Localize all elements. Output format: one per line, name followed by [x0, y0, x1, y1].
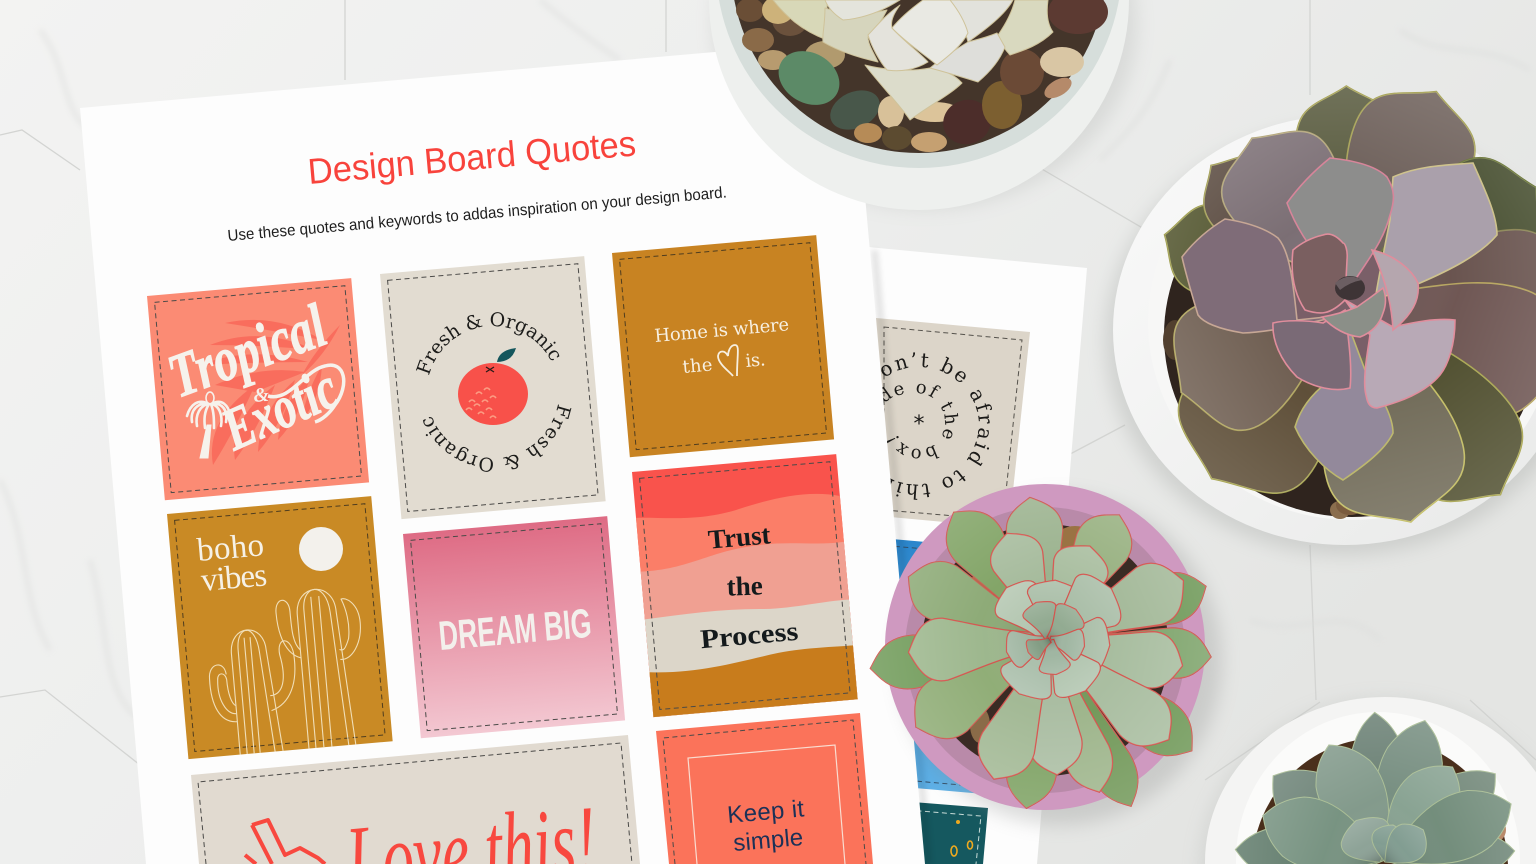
card: trust the process: Process [699, 616, 799, 654]
subtitle: Use these quotes and keywords to addas inspiration on your design board. [227, 184, 727, 245]
outer rosette leaves [866, 493, 1214, 816]
card: home is where the heart is [612, 235, 834, 457]
inner rosette leaves [987, 565, 1131, 708]
card: dream big: DREAM BIG [437, 600, 593, 659]
beige spiral quote card: Don’t be afraid to think [881, 352, 992, 500]
bottom right pot shadow [1199, 698, 1536, 864]
card: dream big [403, 516, 625, 738]
pink pot with green echeveria [866, 484, 1214, 816]
card: tropical and exotic: & [253, 384, 270, 407]
circular text [416, 312, 572, 472]
card: trust the process: Trust [707, 519, 772, 555]
card: keep it simple: Keep it [726, 795, 806, 829]
card: fresh and organic [380, 256, 606, 520]
main design sheet [80, 52, 925, 864]
beige spiral quote card: outside of the box! [882, 384, 958, 459]
card: love this [191, 735, 640, 864]
icon: rock-on hand [245, 820, 325, 864]
teal card [900, 801, 988, 864]
card: keep it simple: simple [732, 824, 805, 857]
middle leaves [1182, 158, 1497, 480]
right pot with purple echeveria [1113, 67, 1536, 545]
pink pot shadow [898, 495, 1222, 825]
card: boho vibes [167, 496, 393, 759]
card: boho vibes: vibes [200, 557, 268, 599]
circular text: Fresh & Organic [423, 404, 572, 472]
inner leaves [1273, 234, 1455, 408]
cactus line art [202, 586, 371, 757]
card: trust the process: the [726, 570, 763, 602]
tropical lettering: Tropical [160, 292, 336, 411]
large right pot shadow [1105, 125, 1536, 555]
boho text: boho [196, 527, 265, 569]
outer leaves [1147, 67, 1536, 540]
card: trust the process [632, 454, 858, 717]
card: home is where the heart is: the [682, 354, 713, 378]
top pot with pale succulent [709, 0, 1129, 210]
sun [299, 527, 343, 571]
top pot shadow [713, 0, 1137, 209]
pebbles [736, 0, 1108, 152]
icon: palm tree [187, 392, 231, 458]
bottom right pot with blue-green succulent [1205, 697, 1536, 864]
icon: hand drawn heart [718, 345, 738, 376]
title: Design Board Quotes [306, 122, 637, 192]
card: home is where the heart is: Home is where [654, 314, 790, 347]
circular text: Fresh & Organic [416, 312, 560, 375]
card: keep it simple [656, 713, 873, 864]
icon: orange fruit [458, 348, 528, 425]
card: tropical and exotic: Exotic [212, 355, 347, 463]
pale succulent [773, 0, 1053, 120]
beige spiral quote card [876, 318, 1030, 522]
sheet shadow [871, 250, 932, 864]
card: tropical and exotic [147, 278, 369, 500]
second design sheet behind [870, 247, 1087, 864]
palm frond [200, 320, 340, 465]
card: home is where the heart is: is. [745, 349, 766, 372]
beige spiral quote card: * [914, 412, 924, 437]
middle rosette leaves [906, 523, 1196, 799]
blue card [859, 538, 1010, 794]
